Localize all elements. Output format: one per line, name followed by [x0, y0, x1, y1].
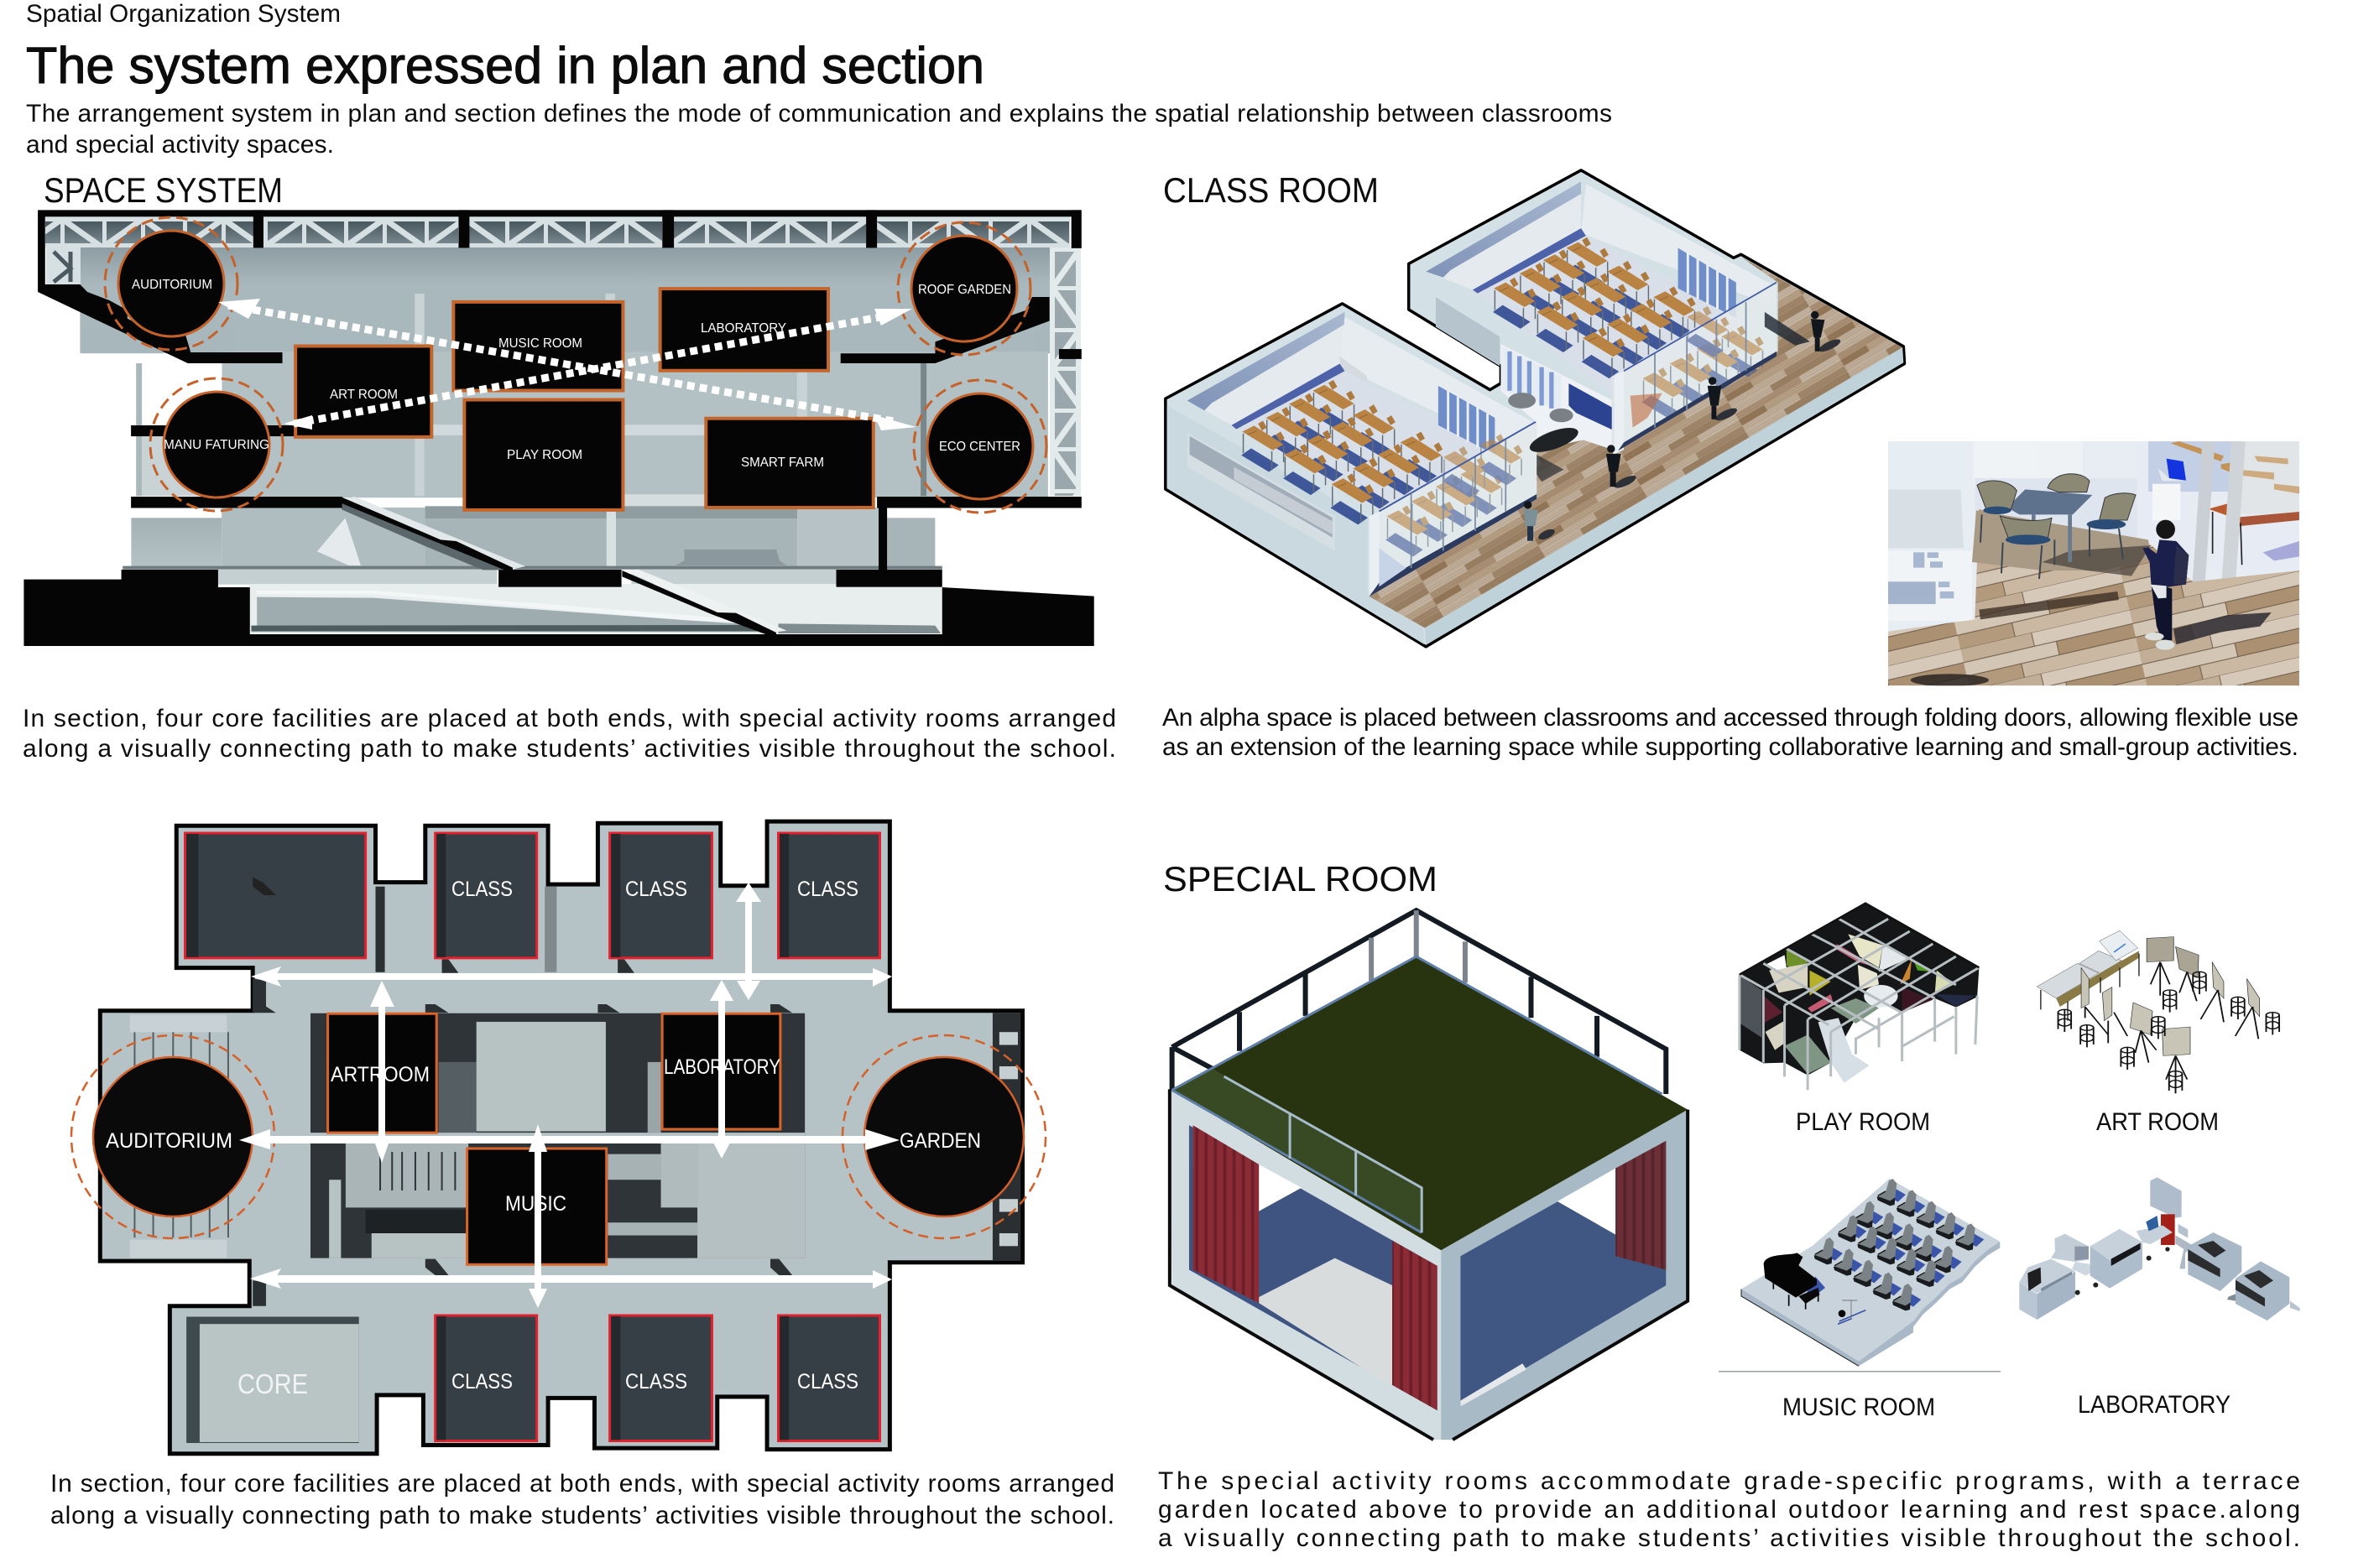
white circulation arrows [239, 883, 900, 1308]
classrooms [185, 833, 879, 1440]
green roof [1172, 956, 1688, 1250]
plan caption: along a visually connecting path to make students’ activities visible throughout the school. [50, 1502, 1114, 1529]
alpha space with folding doors [1500, 344, 1662, 457]
plan caption [50, 1470, 1114, 1529]
intro text block [26, 100, 1612, 159]
panel: special room [1158, 859, 2300, 1552]
isometric roof garden room [1170, 910, 1688, 1440]
small isometric: music room [1741, 1179, 2000, 1366]
plan room labels: CLASS [451, 878, 513, 901]
right classroom [1426, 181, 1777, 455]
plan column stubs [253, 887, 792, 1306]
plan room labels: ARTROOM [331, 1063, 430, 1086]
isometric classroom drawing [1166, 170, 1904, 647]
core facility circles in plan [71, 1035, 1046, 1238]
plan drawing [100, 821, 1023, 1454]
small isometric: play room [1740, 904, 1979, 1090]
curtains [1193, 1125, 1666, 1410]
plan room labels: CLASS [797, 1370, 858, 1393]
section room labels: SMART FARM [741, 456, 824, 470]
plan room labels [106, 878, 981, 1399]
terrace photo [1888, 441, 2299, 686]
panel: space system [23, 170, 1116, 763]
small isometric: art room [2037, 930, 2279, 1093]
roof railing [1172, 910, 1666, 1094]
intro text block: and special activity spaces. [26, 131, 334, 159]
plan room labels: CORE [237, 1368, 308, 1399]
dashed white connection arrows [218, 299, 916, 430]
core facility circles in section [105, 217, 1046, 513]
plan room labels: CLASS [451, 1370, 513, 1393]
roof truss bays [45, 216, 1081, 496]
section room labels: AUDITORIUM [132, 278, 212, 292]
special room caption [1158, 1467, 2300, 1552]
section room labels: MANU FATURING [164, 438, 269, 452]
students [1523, 311, 1842, 542]
special rooms in section [295, 289, 874, 510]
small room labels [1782, 1108, 2231, 1421]
activity rooms in plan [328, 1013, 780, 1264]
plan room labels: CLASS [797, 878, 858, 901]
section room labels: ECO CENTER [939, 440, 1020, 454]
plan caption: In section, four core facilities are placed at both ends, with special activity rooms arranged [50, 1470, 1114, 1498]
small room labels: ART ROOM [2096, 1108, 2219, 1136]
special room caption: The special activity rooms accommodate grade-specific programs, with a terrace [1158, 1467, 2300, 1495]
small room labels: PLAY ROOM [1796, 1108, 1930, 1136]
section drawing [23, 210, 1094, 646]
section room labels: ART ROOM [330, 388, 398, 402]
classroom caption [1162, 704, 2298, 761]
special room caption: a visually connecting path to make students’ activities visible throughout the school. [1158, 1524, 2300, 1552]
plan room labels: MUSIC [505, 1192, 566, 1216]
section caption: along a visually connecting path to make students’ activities visible throughout the school. [23, 735, 1116, 763]
heading: class room: CLASS ROOM [1163, 170, 1379, 210]
student figure [2142, 520, 2189, 650]
section room labels: ROOF GARDEN [918, 283, 1011, 297]
heading: special room: SPECIAL ROOM [1163, 859, 1437, 899]
plan room labels: AUDITORIUM [106, 1129, 232, 1153]
left classroom [1187, 312, 1537, 596]
section caption: In section, four core facilities are placed at both ends, with special activity rooms arranged [23, 705, 1116, 732]
special room caption: garden located above to provide an additional outdoor learning and rest space.along [1158, 1496, 2300, 1524]
small room labels: MUSIC ROOM [1782, 1393, 1935, 1421]
plan room labels: GARDEN [900, 1129, 981, 1153]
small room labels: LABORATORY [2078, 1391, 2231, 1419]
plan room labels: CLASS [625, 878, 687, 901]
section room labels: MUSIC ROOM [498, 336, 582, 351]
plan room labels: CLASS [625, 1370, 687, 1393]
section room labels: LABORATORY [701, 321, 786, 336]
section caption [23, 705, 1116, 763]
corridor wood floor [1370, 255, 1902, 628]
eyebrow: Spatial Organization System: Spatial Organization System [26, 0, 341, 28]
lower floors and basement [23, 497, 1094, 646]
plan room labels: LABORATORY [664, 1055, 780, 1079]
classroom caption: as an extension of the learning space while supporting collaborative learning and small-group activities. [1162, 733, 2298, 761]
wall shadows [1537, 455, 1563, 482]
core [186, 1316, 359, 1443]
section room labels [132, 278, 1020, 470]
classroom caption: An alpha space is placed between classrooms and accessed through folding doors, allowing flexible use [1162, 704, 2298, 732]
label rule [1719, 1371, 2001, 1373]
panel: class room [1162, 170, 2299, 761]
title: The system expressed in plan and section [26, 37, 984, 94]
wood deck [1888, 509, 2299, 685]
central stair and lift block [310, 1013, 805, 1258]
table and chairs [2007, 489, 2092, 514]
panel: floor plan [50, 821, 1114, 1529]
section room labels: PLAY ROOM [507, 448, 582, 462]
small isometric: laboratory [2019, 1177, 2300, 1321]
intro text block: The arrangement system in plan and section defines the mode of communication and explains the spatial relationship between classrooms [26, 100, 1612, 128]
heading: space system: SPACE SYSTEM [44, 170, 283, 210]
